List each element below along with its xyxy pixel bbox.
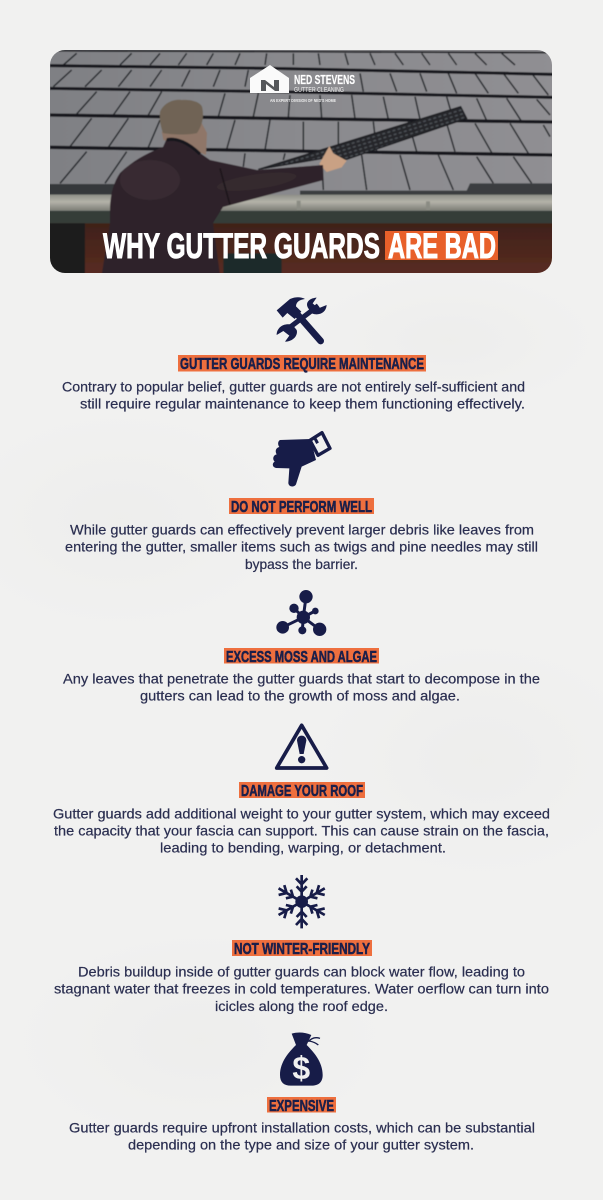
text: expense: Gutter guards require upfront installation costs, which can be substantial xyxy=(69,1120,535,1136)
guard tube xyxy=(258,107,467,169)
text: winter: icicles along the roof edge. xyxy=(215,999,388,1014)
heading: performance xyxy=(229,498,374,516)
heading: roof damage: DAMAGE YOUR ROOF xyxy=(241,783,363,800)
text: moss and algae: gutters can lead to the growth of moss and algae. xyxy=(140,688,460,704)
text: roof damage xyxy=(53,806,550,856)
neck and face xyxy=(162,120,207,155)
text: expense: depending on the type and size of your gutter system. xyxy=(128,1138,474,1152)
text: roof damage: leading to bending, warping, or detachment. xyxy=(160,840,446,856)
logo tagline: AN EXPERT DIVISION OF NED'S HOME xyxy=(270,98,336,103)
text: performance: While gutter guards can effectively prevent larger debris like leaves from xyxy=(70,522,534,538)
text: roof damage: Gutter guards add additional weight to your gutter system, which may exceed xyxy=(53,806,550,822)
title: ARE BAD xyxy=(388,227,496,266)
brick wall xyxy=(84,223,552,273)
text: roof damage: the capacity that your fascia can support. This can cause strain on the fascia, xyxy=(54,824,549,838)
heading: winter: NOT WINTER-FRIENDLY xyxy=(234,941,370,958)
title highlight xyxy=(385,231,498,260)
section: moss and algae xyxy=(63,590,540,704)
hair xyxy=(160,100,203,134)
text: maintenance: still require regular maintenance to keep them functioning effectively. xyxy=(80,396,525,412)
icon: warning triangle xyxy=(277,725,327,768)
logo house mark xyxy=(250,65,289,93)
text: winter: Debris buildup inside of gutter guards can block water flow, leading to xyxy=(78,964,525,980)
icon: money bag: $ xyxy=(292,1050,310,1086)
heading: roof damage xyxy=(239,782,365,800)
gutter guard along the eaves xyxy=(47,184,117,195)
heading: performance: DO NOT PERFORM WELL xyxy=(231,499,372,516)
section: performance xyxy=(65,433,538,572)
heading: expense: EXPENSIVE xyxy=(269,1098,334,1115)
gutter xyxy=(47,195,557,211)
heading: maintenance: GUTTER GUARDS REQUIRE MAINTENANCE xyxy=(180,356,424,373)
fascia xyxy=(47,211,557,224)
section: roof damage xyxy=(53,725,550,856)
text: expense xyxy=(69,1120,535,1152)
text: winter xyxy=(54,964,549,1014)
hand xyxy=(319,146,347,172)
icon: hammer and wrench xyxy=(277,297,327,342)
hero photo: worker fitting a gutter guard xyxy=(47,47,557,277)
text: moss and algae xyxy=(63,672,540,704)
jacket highlights xyxy=(120,160,180,200)
jacket collar xyxy=(167,139,200,154)
logo wordmark: NED STEVENS xyxy=(294,72,355,87)
icon: snowflake xyxy=(276,875,328,928)
text: maintenance xyxy=(62,380,525,412)
heading: maintenance xyxy=(178,355,426,373)
heading: moss and algae xyxy=(224,648,379,666)
section: winter xyxy=(54,875,549,1014)
dark batten lines xyxy=(50,51,553,155)
text: performance: entering the gutter, smaller items such as twigs and pine needles may still xyxy=(65,540,538,554)
icon: money bag xyxy=(280,1033,323,1086)
title: WHY GUTTER GUARDS xyxy=(103,227,380,266)
icon: moss molecule xyxy=(276,590,326,636)
section: maintenance xyxy=(62,297,525,412)
text: moss and algae: Any leaves that penetrate the gutter guards that start to decompose in the xyxy=(63,672,540,686)
text: performance: bypass the barrier. xyxy=(245,557,358,572)
tile joints xyxy=(53,53,550,190)
text: maintenance: Contrary to popular belief, gutter guards are not entirely self-sufficient and xyxy=(62,380,525,394)
heading: moss and algae: EXCESS MOSS AND ALGAE xyxy=(226,649,377,666)
section: expense xyxy=(69,1033,535,1152)
logo subline: GUTTER CLEANING xyxy=(294,87,344,94)
heading: expense xyxy=(267,1097,336,1115)
text: winter: stagnant water that freezes in cold temperatures. Water oerflow can turn into xyxy=(54,982,549,996)
text: performance xyxy=(65,522,538,572)
logo xyxy=(250,65,355,103)
jacket xyxy=(102,138,324,275)
icon: thumbs down xyxy=(273,433,330,486)
